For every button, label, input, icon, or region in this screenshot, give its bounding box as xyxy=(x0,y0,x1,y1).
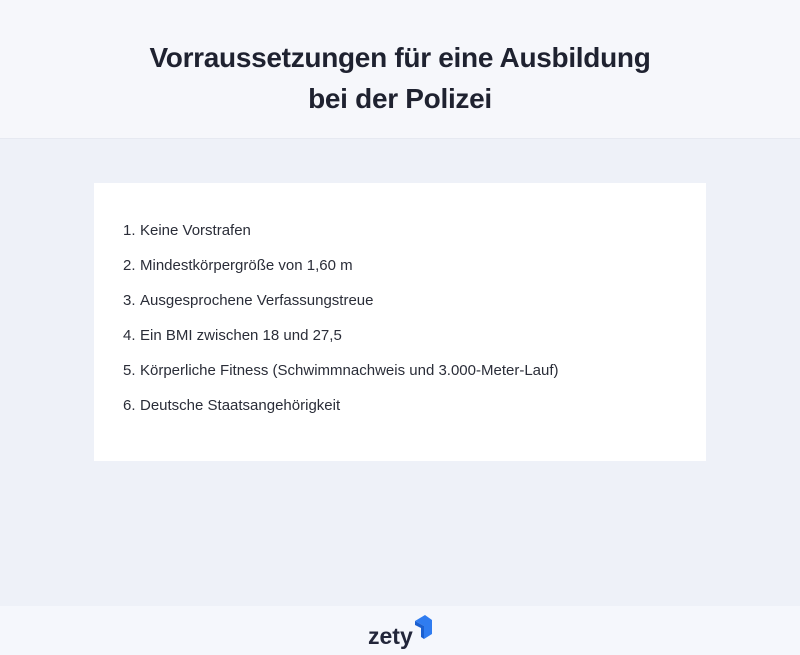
item 5: Körperliche Fitness (Schwimmnachweis und 3.000-Meter-Lauf) xyxy=(140,362,559,379)
item 2: Mindestkörpergröße von 1,60 m xyxy=(140,257,353,274)
item 6: 6. xyxy=(123,397,136,414)
title xyxy=(149,42,651,114)
logo: zety: zety xyxy=(368,623,413,649)
logo: zety xyxy=(368,615,432,649)
item 1: 1. xyxy=(123,222,136,239)
item 4: Ein BMI zwischen 18 und 27,5 xyxy=(140,327,342,344)
title: Vorraussetzungen für eine Ausbildung xyxy=(149,42,651,73)
footer band xyxy=(0,606,800,655)
item 6: Deutsche Staatsangehörigkeit xyxy=(140,397,340,414)
item 5: 5. xyxy=(123,362,136,379)
item 4: 4. xyxy=(123,327,136,344)
item 3: 3. xyxy=(123,292,136,309)
panel: requirements list xyxy=(94,183,706,461)
item 3: Ausgesprochene Verfassungstreue xyxy=(140,292,374,309)
header band xyxy=(0,0,800,139)
item 2: 2. xyxy=(123,257,136,274)
title: bei der Polizei xyxy=(308,83,492,114)
item 1: Keine Vorstrafen xyxy=(140,222,251,239)
